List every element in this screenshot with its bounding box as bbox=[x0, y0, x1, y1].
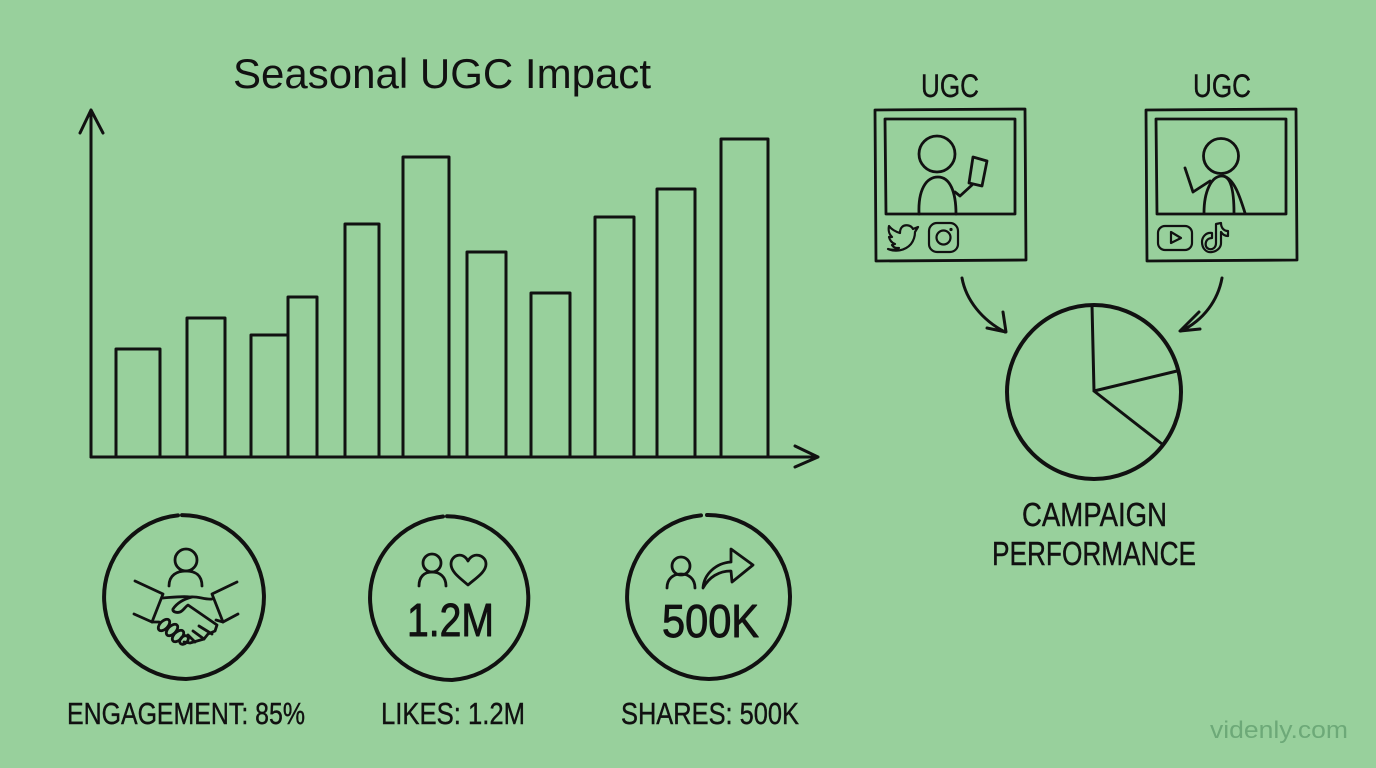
panel: right UGC card bbox=[1146, 68, 1297, 261]
bars bbox=[116, 139, 768, 457]
icon: share arrow bbox=[703, 549, 753, 588]
engagement ring bbox=[104, 515, 264, 679]
shares value: 500K bbox=[662, 595, 759, 647]
icon: person bbox=[667, 557, 695, 588]
icon: person bbox=[419, 554, 446, 586]
arrow: left card to pie bbox=[962, 278, 1006, 332]
title: Seasonal UGC Impact bbox=[233, 50, 651, 97]
y axis arrow bbox=[80, 110, 103, 457]
likes value: 1.2M bbox=[407, 594, 494, 646]
person holding phone bbox=[919, 136, 987, 214]
campaign performance label bbox=[992, 496, 1196, 572]
x axis arrow bbox=[91, 446, 818, 467]
watermark: videnly.com bbox=[1210, 717, 1348, 744]
campaign performance label: PERFORMANCE bbox=[992, 535, 1196, 572]
shares ring bbox=[627, 515, 790, 679]
left card frame bbox=[875, 109, 1026, 261]
right UGC label: UGC bbox=[1193, 68, 1251, 104]
panel: shares stat bbox=[627, 515, 790, 679]
right card frame bbox=[1146, 109, 1297, 261]
likes ring bbox=[370, 516, 528, 680]
campaign performance label: CAMPAIGN bbox=[1022, 496, 1167, 533]
pie chart bbox=[1007, 305, 1181, 479]
likes caption: LIKES: 1.2M bbox=[381, 696, 525, 731]
icon: instagram bbox=[929, 223, 958, 252]
icon: heart bbox=[451, 555, 486, 585]
panel: left UGC card bbox=[875, 68, 1026, 261]
panel: engagement stat bbox=[104, 515, 264, 679]
engagement caption: ENGAGEMENT: 85% bbox=[67, 696, 305, 731]
icon: twitter bird bbox=[888, 225, 918, 251]
person waving bbox=[1185, 138, 1245, 213]
arrow: right card to pie bbox=[1180, 278, 1222, 331]
left UGC label: UGC bbox=[921, 68, 979, 104]
bar chart bbox=[80, 110, 818, 467]
icon: handshake bbox=[134, 581, 238, 646]
shares caption: SHARES: 500K bbox=[621, 696, 799, 731]
right video frame bbox=[1156, 119, 1286, 214]
icon: tiktok bbox=[1202, 223, 1228, 252]
icon: youtube bbox=[1158, 226, 1192, 250]
left video frame bbox=[885, 119, 1015, 214]
panel: likes stat bbox=[370, 516, 528, 680]
icon: person bbox=[169, 549, 202, 586]
